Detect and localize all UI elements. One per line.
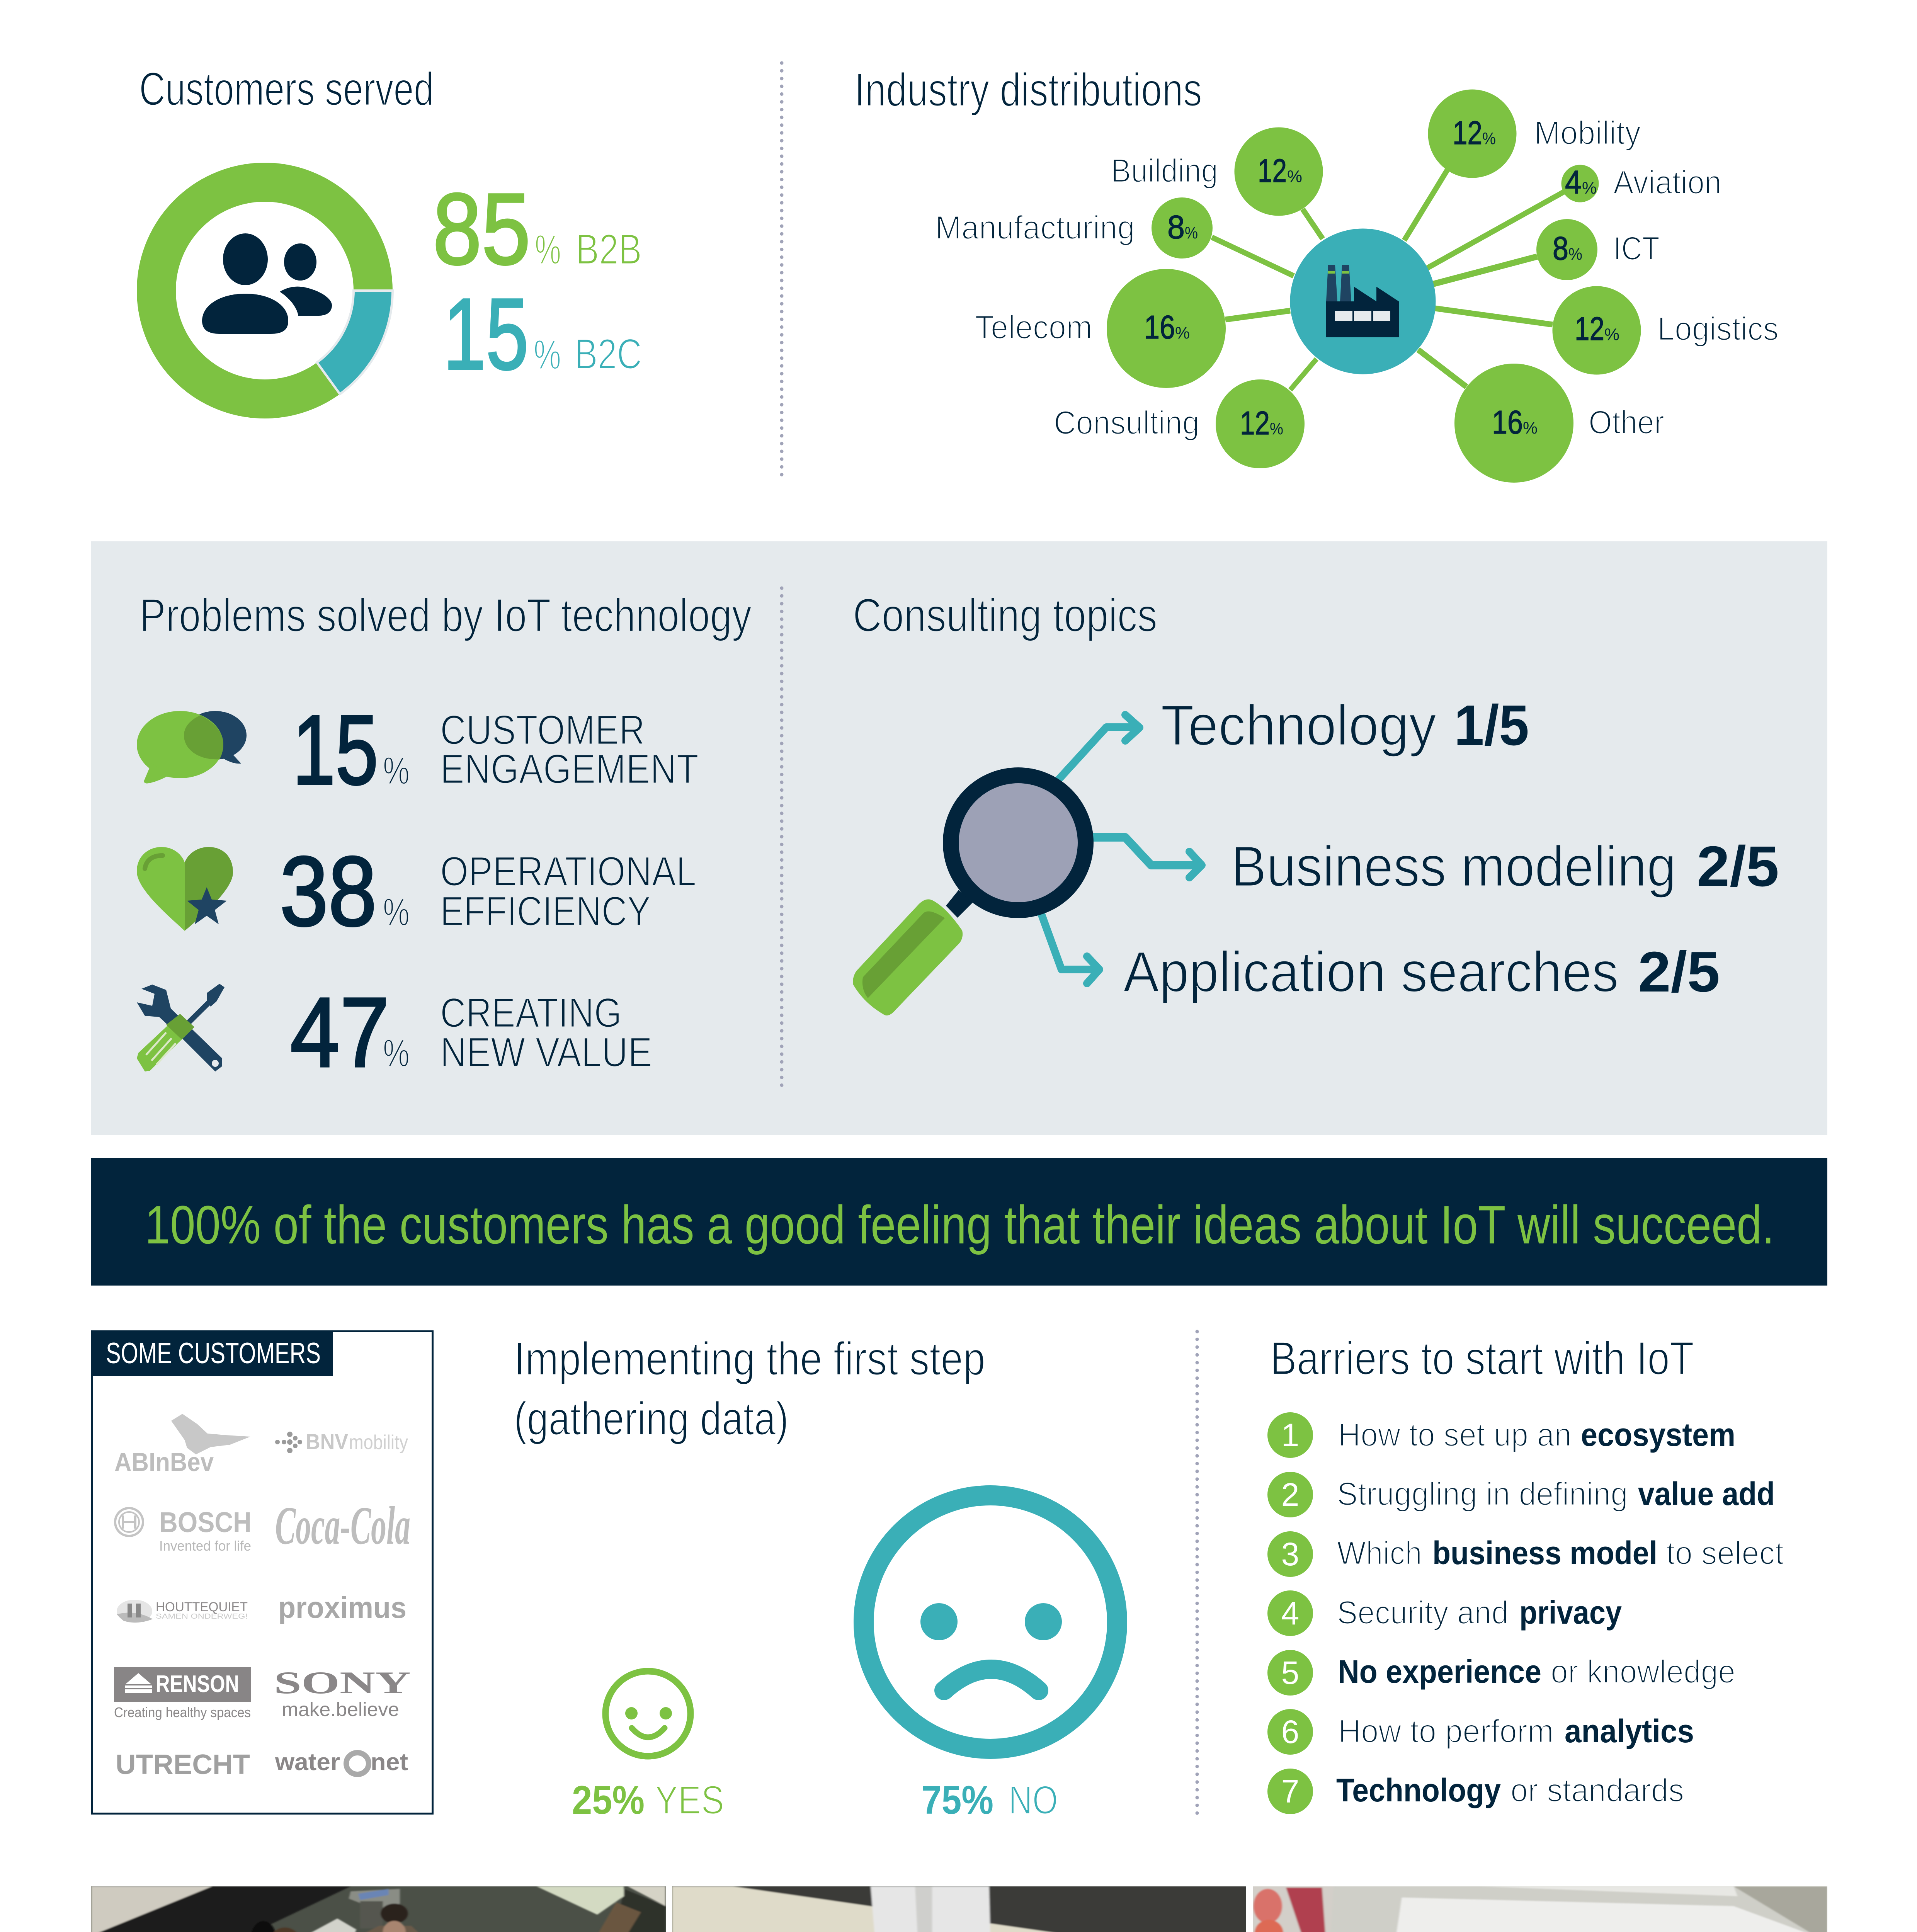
barrier 5 <box>1267 1650 1735 1696</box>
logo: Renson: RENSON <box>156 1671 239 1697</box>
stat: 38% operational efficiency: 38 <box>280 836 377 947</box>
heading: customers served: Customers served <box>139 63 434 115</box>
stat: 85% B2B <box>433 172 642 286</box>
bubble: consulting 12% <box>1054 379 1305 468</box>
logo: BNV mobility <box>275 1429 408 1454</box>
stat: 15% B2C: B2C <box>575 330 642 378</box>
stat: 25% yes: YES <box>655 1778 724 1823</box>
barrier 6: analytics <box>1565 1713 1694 1749</box>
panel: customers served <box>139 63 642 399</box>
icon: heart with star <box>137 847 233 931</box>
stat: 15% customer engagement: CUSTOMER <box>440 706 645 753</box>
arrow: to application searches <box>1041 913 1099 983</box>
barrier 1: How to set up an <box>1338 1417 1572 1453</box>
stat: 47% creating new value: CREATING <box>440 989 622 1036</box>
logo: Houttequiet <box>117 1600 248 1623</box>
banner: 100% of the customers <box>91 1158 1827 1286</box>
logo: Houttequiet: HOUTTEQUIET <box>156 1600 248 1614</box>
bubble: consulting 12%: 12 <box>1240 405 1270 442</box>
logo: Utrecht: UTRECHT <box>116 1749 250 1780</box>
icon: wrench and screwdriver <box>137 984 225 1071</box>
logo: Waternet: net <box>371 1749 408 1776</box>
barrier 2: value add <box>1638 1476 1775 1512</box>
stat: 47% creating new value: NEW VALUE <box>440 1029 652 1075</box>
bubble: manufacturing 8% <box>935 197 1213 259</box>
barrier 5: 5 <box>1281 1655 1299 1691</box>
bubble: ICT 8%: ICT <box>1613 230 1660 267</box>
barrier 3: to select <box>1666 1535 1784 1571</box>
bubble: mobility 12%: Mobility <box>1534 115 1641 151</box>
bubble: mobility 12%: % <box>1482 129 1496 148</box>
stat: 38% operational efficiency: EFFICIENCY <box>440 888 651 934</box>
barrier 4 <box>1267 1590 1622 1636</box>
barrier 4: 4 <box>1281 1595 1299 1631</box>
stat: 75% no <box>922 1778 1058 1823</box>
bubble: ICT 8%: 8 <box>1553 230 1568 267</box>
panel: some customers logos <box>91 1330 433 1814</box>
stat: 15% customer engagement: % <box>383 749 410 793</box>
bubble: logistics 12%: % <box>1604 325 1619 344</box>
barrier 1: 1 <box>1281 1417 1299 1453</box>
topic: technology 1/5: 1/5 <box>1454 694 1529 757</box>
stat: 38% operational efficiency: OPERATIONAL <box>440 848 696 895</box>
logo: Coca-Cola: Coca-Cola <box>275 1496 410 1556</box>
logo: AB InBev: ABInBev <box>114 1447 214 1477</box>
bubble: building 12%: % <box>1287 167 1302 186</box>
bubble: aviation 4% <box>1561 164 1721 202</box>
stat: 15% customer engagement: ENGAGEMENT <box>440 745 699 792</box>
bubble: telecom 16%: 16 <box>1144 309 1175 346</box>
bubble: logistics 12%: 12 <box>1575 311 1604 347</box>
barrier 2: 2 <box>1281 1476 1299 1513</box>
barrier 7: or standards <box>1510 1772 1684 1808</box>
logo: AB InBev <box>114 1414 250 1477</box>
topic: business modeling 2/5: Business modeling <box>1231 835 1676 898</box>
bubble: mobility 12%: 12 <box>1453 115 1482 151</box>
bubble: other 16%: % <box>1523 418 1538 437</box>
barrier 7 <box>1267 1769 1684 1814</box>
bubble: telecom 16% <box>975 269 1226 388</box>
barrier 6 <box>1267 1709 1694 1755</box>
connector lines <box>1212 170 1564 390</box>
stat: 15% B2C: % <box>534 331 561 378</box>
bubble: other 16% <box>1454 364 1664 483</box>
barrier 4: privacy <box>1519 1594 1622 1631</box>
bubble: consulting 12%: % <box>1270 419 1283 438</box>
heading: implementing the first step <box>514 1332 985 1445</box>
logo: Proximus: proximus <box>278 1590 407 1624</box>
logo: Waternet: water <box>275 1749 340 1776</box>
stat: 75% no: 75% <box>922 1778 993 1823</box>
barrier 7: 7 <box>1281 1773 1299 1810</box>
bubble: mobility 12% <box>1428 90 1641 178</box>
panel: grey background with problems and consulting topics <box>91 541 1827 1135</box>
logo: Renson: Creating healthy spaces <box>114 1704 251 1720</box>
bubble: manufacturing 8%: Manufacturing <box>935 209 1135 246</box>
bubble: ICT 8%: % <box>1568 245 1582 264</box>
panel: implementing the first step <box>514 1332 1117 1823</box>
heading: implementing the first step: (gathering data) <box>514 1392 789 1445</box>
stat: 15% customer engagement <box>293 695 699 805</box>
barrier 3: Which <box>1337 1535 1422 1571</box>
heading: industry distributions: Industry distributions <box>854 63 1202 116</box>
stat: 25% yes: 25% <box>572 1778 645 1823</box>
logo: BNV mobility: BNV <box>306 1429 348 1454</box>
panel: barriers to start with IoT <box>1267 1332 1784 1814</box>
bubble: aviation 4%: 4 <box>1565 164 1582 201</box>
arrow: to technology <box>1058 715 1140 780</box>
topic: business modeling 2/5: 2/5 <box>1697 835 1779 898</box>
bubble: telecom 16%: % <box>1175 323 1190 342</box>
stat: 85% B2B: B2B <box>576 226 642 273</box>
icon: sad face <box>864 1495 1117 1749</box>
heading: implementing the first step: Implementing the first step <box>514 1332 985 1385</box>
bubble: consulting 12%: Consulting <box>1054 405 1199 441</box>
barrier 3 <box>1267 1531 1784 1577</box>
barrier 6: 6 <box>1281 1714 1299 1750</box>
stat: 75% no: NO <box>1009 1778 1058 1823</box>
barrier 7: Technology <box>1336 1772 1501 1808</box>
logo: Sony <box>274 1665 411 1720</box>
barrier 4: Security and <box>1337 1594 1509 1631</box>
bubble: building 12% <box>1111 128 1323 216</box>
arrow: to business modeling <box>1092 837 1202 878</box>
barrier 1: ecosystem <box>1581 1417 1735 1453</box>
bubble: ICT 8% <box>1536 219 1660 280</box>
bubble: building 12%: Building <box>1111 153 1218 189</box>
logo: BNV mobility: mobility <box>349 1431 408 1454</box>
icon: magnifying glass <box>853 767 1094 1015</box>
logo: Bosch: Invented for life <box>159 1538 251 1554</box>
donut chart: B2B vs B2C <box>156 182 393 399</box>
logo: Sony: make.believe <box>282 1699 399 1720</box>
stat: 47% creating new value: 47 <box>290 977 390 1088</box>
stat: 85% B2B: 85 <box>433 172 531 286</box>
photo: workshop canvas and coffee cup <box>1253 1886 1827 1932</box>
topic: application searches 2/5: Application searches <box>1123 940 1619 1004</box>
barrier 6: How to perform <box>1338 1713 1554 1749</box>
barrier 2 <box>1267 1472 1775 1517</box>
photo: table discussion <box>672 1886 1246 1932</box>
stat: 25% yes <box>572 1778 724 1823</box>
logo: Sony: SONY <box>274 1665 411 1700</box>
stat: 38% operational efficiency <box>280 836 696 947</box>
heading: consulting topics: Consulting topics <box>853 589 1157 641</box>
central circle with factory icon <box>1290 229 1436 374</box>
bubble: logistics 12%: Logistics <box>1657 311 1779 347</box>
barrier 2: Struggling in defining <box>1337 1476 1628 1512</box>
logo: Bosch <box>115 1506 252 1554</box>
barrier 5: No experience <box>1338 1653 1541 1690</box>
bubble: telecom 16%: Telecom <box>975 309 1092 346</box>
barrier 5: or knowledge <box>1551 1653 1735 1690</box>
logo: Waternet <box>275 1749 408 1776</box>
bubble: logistics 12% <box>1553 286 1779 375</box>
stat: 15% B2C: 15 <box>443 277 529 391</box>
bubble: aviation 4%: % <box>1582 179 1597 197</box>
bubble: other 16%: Other <box>1589 404 1664 441</box>
logo: Houttequiet: SAMEN ONDERWEG! <box>156 1612 248 1620</box>
heading: barriers: Barriers to start with IoT <box>1270 1332 1694 1384</box>
header tag: some customers <box>91 1330 333 1376</box>
stat: 15% B2C <box>443 277 642 391</box>
barrier 3: 3 <box>1281 1536 1299 1572</box>
stat: 47% creating new value: % <box>383 1032 410 1075</box>
bubble: manufacturing 8%: % <box>1185 223 1198 242</box>
heading: problems solved: Problems solved by IoT technology <box>139 589 752 641</box>
bubble: manufacturing 8%: 8 <box>1167 209 1185 246</box>
logo: Bosch: BOSCH <box>159 1506 252 1538</box>
header tag: some customers: SOME CUSTOMERS <box>106 1337 321 1370</box>
logo: Renson <box>114 1667 251 1720</box>
icon: people <box>202 233 332 334</box>
icon: smiling face <box>606 1671 691 1756</box>
photo: group standing around tables <box>90 1886 666 1932</box>
icon: chat bubbles <box>137 711 247 783</box>
bubble: building 12%: 12 <box>1258 153 1287 189</box>
barrier 1 <box>1267 1412 1735 1458</box>
stat: 85% B2B: % <box>535 226 561 273</box>
stat: 47% creating new value <box>290 977 652 1088</box>
stat: 38% operational efficiency: % <box>383 891 410 934</box>
bubble: other 16%: 16 <box>1492 404 1523 441</box>
bubble: aviation 4%: Aviation <box>1613 164 1721 201</box>
topic: application searches 2/5: 2/5 <box>1638 940 1720 1004</box>
topic: technology 1/5: Technology <box>1161 694 1436 757</box>
panel: industry distributions <box>854 63 1779 483</box>
barrier 3: business model <box>1432 1535 1657 1571</box>
stat: 15% customer engagement: 15 <box>293 695 378 805</box>
